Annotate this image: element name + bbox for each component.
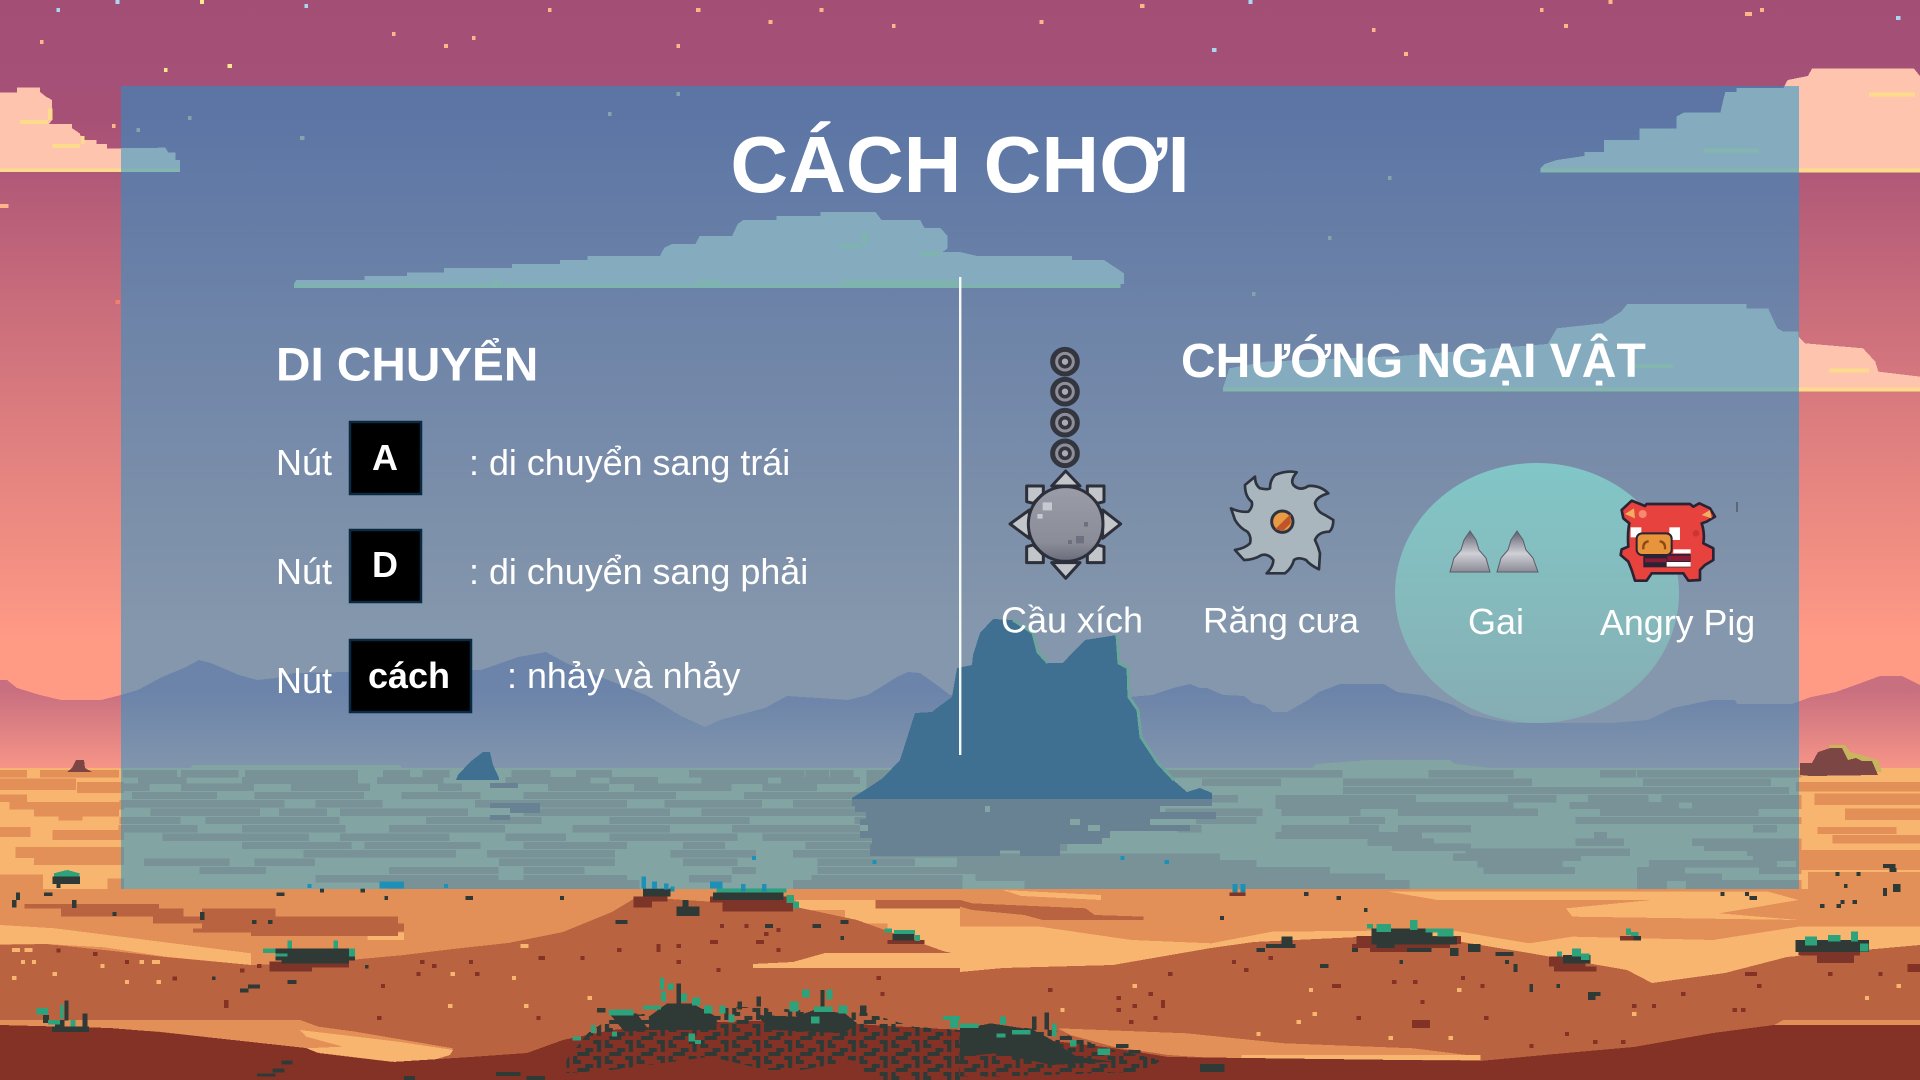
- specks and pebbles left: [12, 888, 885, 1080]
- sand streaks left half: [0, 772, 960, 889]
- island rim highlight upper: [1013, 620, 1048, 663]
- row: move right: Nút: [276, 551, 332, 592]
- medium sand belt: [0, 889, 1920, 1019]
- shrubs left: [37, 856, 924, 1032]
- label: chain ball: Cầu xích: [1001, 600, 1143, 640]
- clouds left: [0, 88, 960, 288]
- vertical divider: [959, 277, 961, 755]
- far mountains: [0, 652, 1920, 770]
- icon: floor spikes: [1450, 531, 1538, 572]
- lighter sand patches right: [960, 890, 1920, 988]
- rust hills: [0, 897, 1920, 1080]
- island reflection streaks: [490, 783, 1216, 856]
- shrubs right: [960, 856, 1869, 1077]
- sun: [1395, 463, 1679, 723]
- small mark near pig: [1736, 502, 1738, 512]
- large island rock: [852, 619, 1212, 799]
- far right rock: [1825, 745, 1882, 772]
- specks and pebbles right: [1048, 864, 1920, 1072]
- island rim highlight lower: [1117, 635, 1174, 780]
- icon: saw blade: [1231, 472, 1333, 573]
- row: move left: Nút: [276, 442, 332, 483]
- row: jump: : nhảy và nhảy: [507, 656, 741, 696]
- label: saw blade: Răng cưa: [1203, 600, 1359, 640]
- desert sand base: [0, 768, 1920, 1080]
- heading: di chuyển: DI CHUYỂN: [276, 338, 538, 392]
- stars: [0, 0, 896, 304]
- sky: [0, 0, 1920, 780]
- row: move left: : di chuyển sang trái: [469, 443, 790, 483]
- row: jump: cách: [368, 655, 450, 696]
- icon: chain ball: [1010, 349, 1121, 578]
- dark foreground soil: [0, 1020, 1920, 1080]
- label: spikes: Gai: [1468, 601, 1524, 642]
- heading: chướng ngại vật: CHƯỚNG NGẠI VẬT: [1181, 333, 1646, 388]
- panel: obstacles: [1001, 333, 1755, 643]
- translucent blue panel: [121, 86, 1799, 889]
- shrubs bottom big: [496, 977, 960, 1080]
- row: move right: D: [372, 544, 398, 585]
- row: move right: [276, 530, 808, 602]
- small island rock: [456, 752, 499, 780]
- stars right: [1040, 0, 1900, 296]
- clouds right: [960, 68, 1920, 392]
- panel: movement controls: [276, 338, 808, 712]
- icon: angry pig: [1621, 501, 1715, 581]
- row: move left: A: [372, 437, 398, 478]
- title: CÁCH CHƠI: [730, 120, 1190, 209]
- light sand band on hills: [753, 953, 960, 968]
- row: jump: [276, 640, 741, 712]
- row: jump: Nút: [276, 660, 332, 701]
- lighter sand patches left: [0, 900, 960, 965]
- sand streaks right half: [960, 772, 1920, 888]
- far left rock: [67, 760, 92, 772]
- label: angry pig: Angry Pig: [1600, 603, 1755, 643]
- row: move right: : di chuyển sang phải: [469, 552, 808, 592]
- sand patch bottom left: [0, 1020, 453, 1063]
- sand patch bottom right: [1058, 1020, 1920, 1060]
- row: move left: [276, 422, 790, 494]
